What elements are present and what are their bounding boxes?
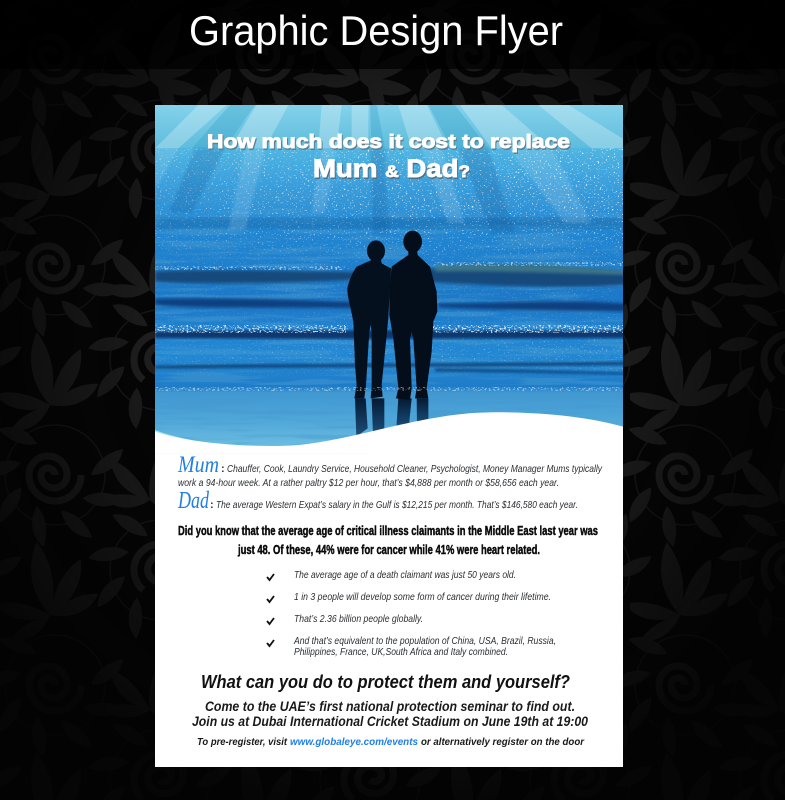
call to action heading: What can you do to protect them and yourself? — [201, 672, 570, 692]
bold statistic paragraph — [178, 524, 598, 557]
Mum script label: Mum — [177, 452, 219, 477]
headline line 1: How much does it cost to replace — [207, 132, 570, 153]
text block: Dad: : — [210, 499, 214, 511]
sky with sun rays — [155, 105, 623, 149]
checklist text: That’s 2.36 billion people globally. — [294, 613, 423, 625]
text block: Dad: The average Western Expat’s salary in the Gulf is $12,215 per month. That’s $146,580 each year. — [216, 499, 578, 511]
flyer white sheet — [155, 105, 623, 767]
headline line 2: Mum & Dad ? — [313, 155, 470, 183]
breaking wave foam sparkle — [155, 262, 623, 391]
silhouette: woman — [347, 240, 391, 398]
bold statistic paragraph: just 48. Of these, 44% were for cancer while 41% were heart related. — [237, 543, 540, 557]
checklist text: Philippines, France, UK,South Africa and Italy combined. — [294, 646, 508, 658]
headline — [207, 132, 571, 184]
waves and light rays — [155, 105, 625, 437]
checklist — [267, 569, 556, 658]
white wave divider — [155, 412, 623, 453]
wet sand streak texture — [180, 427, 356, 445]
sun rays — [155, 105, 625, 148]
event details — [192, 699, 588, 729]
event details: Come to the UAE’s first national protection seminar to find out. — [205, 699, 575, 714]
title: Graphic Design Flyer — [189, 7, 563, 54]
registration line: or alternatively register on the door — [421, 736, 585, 748]
headline line 1: How much does it cost to replace — [208, 134, 571, 154]
registration line: To pre-register, visit — [197, 736, 287, 748]
water streak texture — [155, 190, 623, 385]
text block: Dad — [177, 488, 578, 514]
registration line: www.globaleye.com/events — [290, 736, 418, 748]
headline line 2: Mum & Dad ? — [314, 156, 471, 184]
text block: Mum: Chauffer, Cook, Laundry Service, Household Cleaner, Psychologist, Money Manager Mums typically — [227, 463, 603, 475]
Dad script label: Dad — [177, 488, 210, 514]
bold statistic paragraph: Did you know that the average age of critical illness claimants in the Middle East last year was — [178, 524, 598, 538]
registration line — [197, 736, 585, 748]
water sparkles — [155, 148, 623, 380]
checklist text: 1 in 3 people will develop some form of cancer during their lifetime. — [294, 591, 551, 603]
text block: Mum: work a 94-hour week. At a rather paltry $12 per hour, that’s $4,888 per month or $58,656 each year. — [178, 477, 559, 489]
check icons — [267, 574, 274, 646]
couple reflection in wet sand — [355, 398, 428, 437]
photo: couple on beach with sun rays — [155, 105, 625, 450]
sea and wet sand — [155, 148, 623, 450]
checklist text — [293, 569, 556, 658]
event details: Join us at Dubai International Cricket Stadium on June 19th at 19:00 — [192, 714, 588, 729]
text block: Mum: : — [221, 463, 225, 475]
silhouette: man — [389, 231, 437, 400]
text block: Mum — [177, 452, 603, 489]
checklist text: And that’s equivalent to the population of China, USA, Brazil, Russia, — [293, 635, 556, 647]
checklist text: The average age of a death claimant was just 50 years old. — [294, 569, 516, 581]
panel: flyer — [155, 105, 625, 767]
